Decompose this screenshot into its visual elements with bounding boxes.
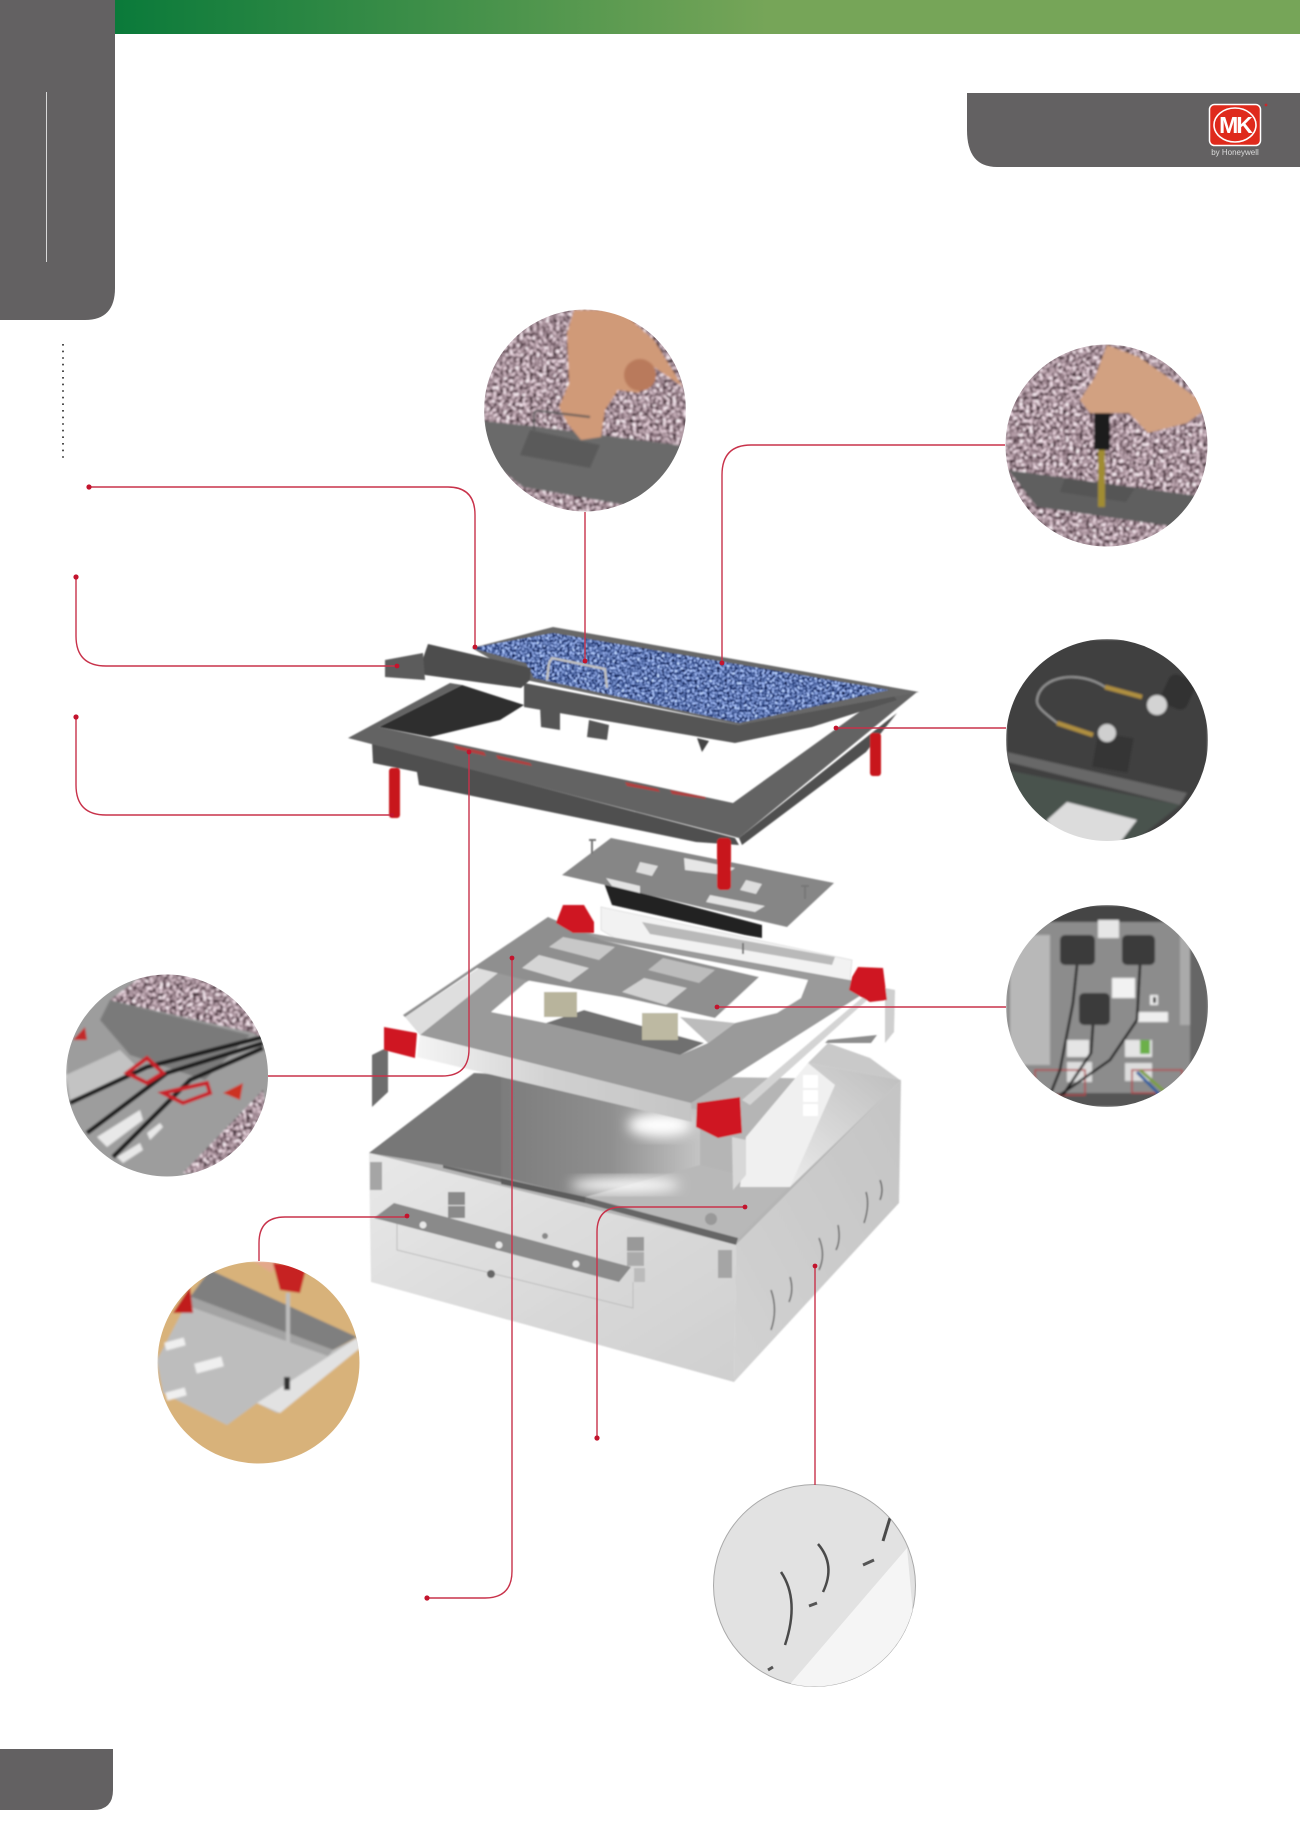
centre opening: [491, 940, 808, 1055]
lift handle: [547, 658, 607, 688]
callout leader lines: [76, 445, 1006, 1598]
upper plate: [403, 917, 759, 1018]
floor box frame: [348, 683, 917, 890]
leader: bracket: [259, 1217, 407, 1261]
box right face with knockouts: [734, 1080, 901, 1382]
leader: height legs: [76, 717, 392, 815]
blue carpet: [472, 633, 889, 723]
photo circle: cable retention: [66, 970, 275, 1180]
MK by Honeywell logo: MK: [1219, 112, 1253, 138]
photo circle: screwdriver on lid: [1005, 344, 1209, 548]
red legs: [389, 733, 881, 890]
hinge bar: [420, 644, 531, 688]
side brackets: [372, 1047, 388, 1107]
interior left wall: [369, 1073, 501, 1177]
right logo tab: [967, 93, 1300, 167]
photo circle: earth wire: [1006, 639, 1208, 845]
header gradient bar: [115, 0, 1300, 34]
socket plate: [562, 838, 834, 954]
inner right wall: [748, 1063, 901, 1187]
leader: cable retention: [268, 752, 469, 1076]
MK by Honeywell logo: [1210, 104, 1267, 157]
photo circle: plugs in socket box: [1006, 905, 1210, 1107]
left section tab: [0, 0, 115, 320]
leader end dots: [73, 484, 838, 1601]
mounting bracket plate: [374, 1203, 631, 1282]
front silver strip: [417, 1035, 692, 1122]
MK by Honeywell logo: by Honeywell: [1211, 148, 1259, 157]
back wall strip: [601, 907, 852, 992]
adapter frame: [372, 905, 895, 1190]
leader: data plate: [427, 958, 512, 1598]
photo circle: lifting lid with handle: [484, 309, 686, 513]
leader: hinged lid: [89, 487, 475, 647]
leader: lid corner block: [76, 577, 397, 666]
floor lid with carpet: [385, 627, 919, 752]
bottom page-number tab: [0, 1749, 113, 1810]
red frame tabs: [454, 745, 706, 799]
frame floor plate: [420, 925, 877, 1103]
leader: earth wire: [836, 727, 1006, 729]
leader: carpet tray: [722, 445, 1005, 663]
exploded product illustration: [348, 627, 919, 1382]
left silver wall: [405, 968, 498, 1035]
leader: back box interior: [597, 1207, 745, 1438]
right silver strip: [742, 985, 884, 1105]
photo circle: knockouts: [714, 1484, 920, 1690]
interior back wall: [501, 1075, 700, 1197]
leader: knockouts: [814, 1266, 816, 1485]
leader: socket plate: [717, 1006, 1006, 1008]
dotted vertical divider: [62, 344, 64, 462]
box front face: [369, 1153, 736, 1382]
red corner clips: [384, 905, 887, 1138]
data modules: [544, 992, 577, 1017]
front face hook tabs: [370, 1162, 382, 1190]
screws: [589, 840, 809, 954]
metal back box: [369, 1035, 901, 1382]
photo circle: fixing plate with screwdriver: [157, 1261, 361, 1465]
leader: lift handle: [584, 512, 586, 661]
front lip shadow: [443, 1165, 738, 1245]
